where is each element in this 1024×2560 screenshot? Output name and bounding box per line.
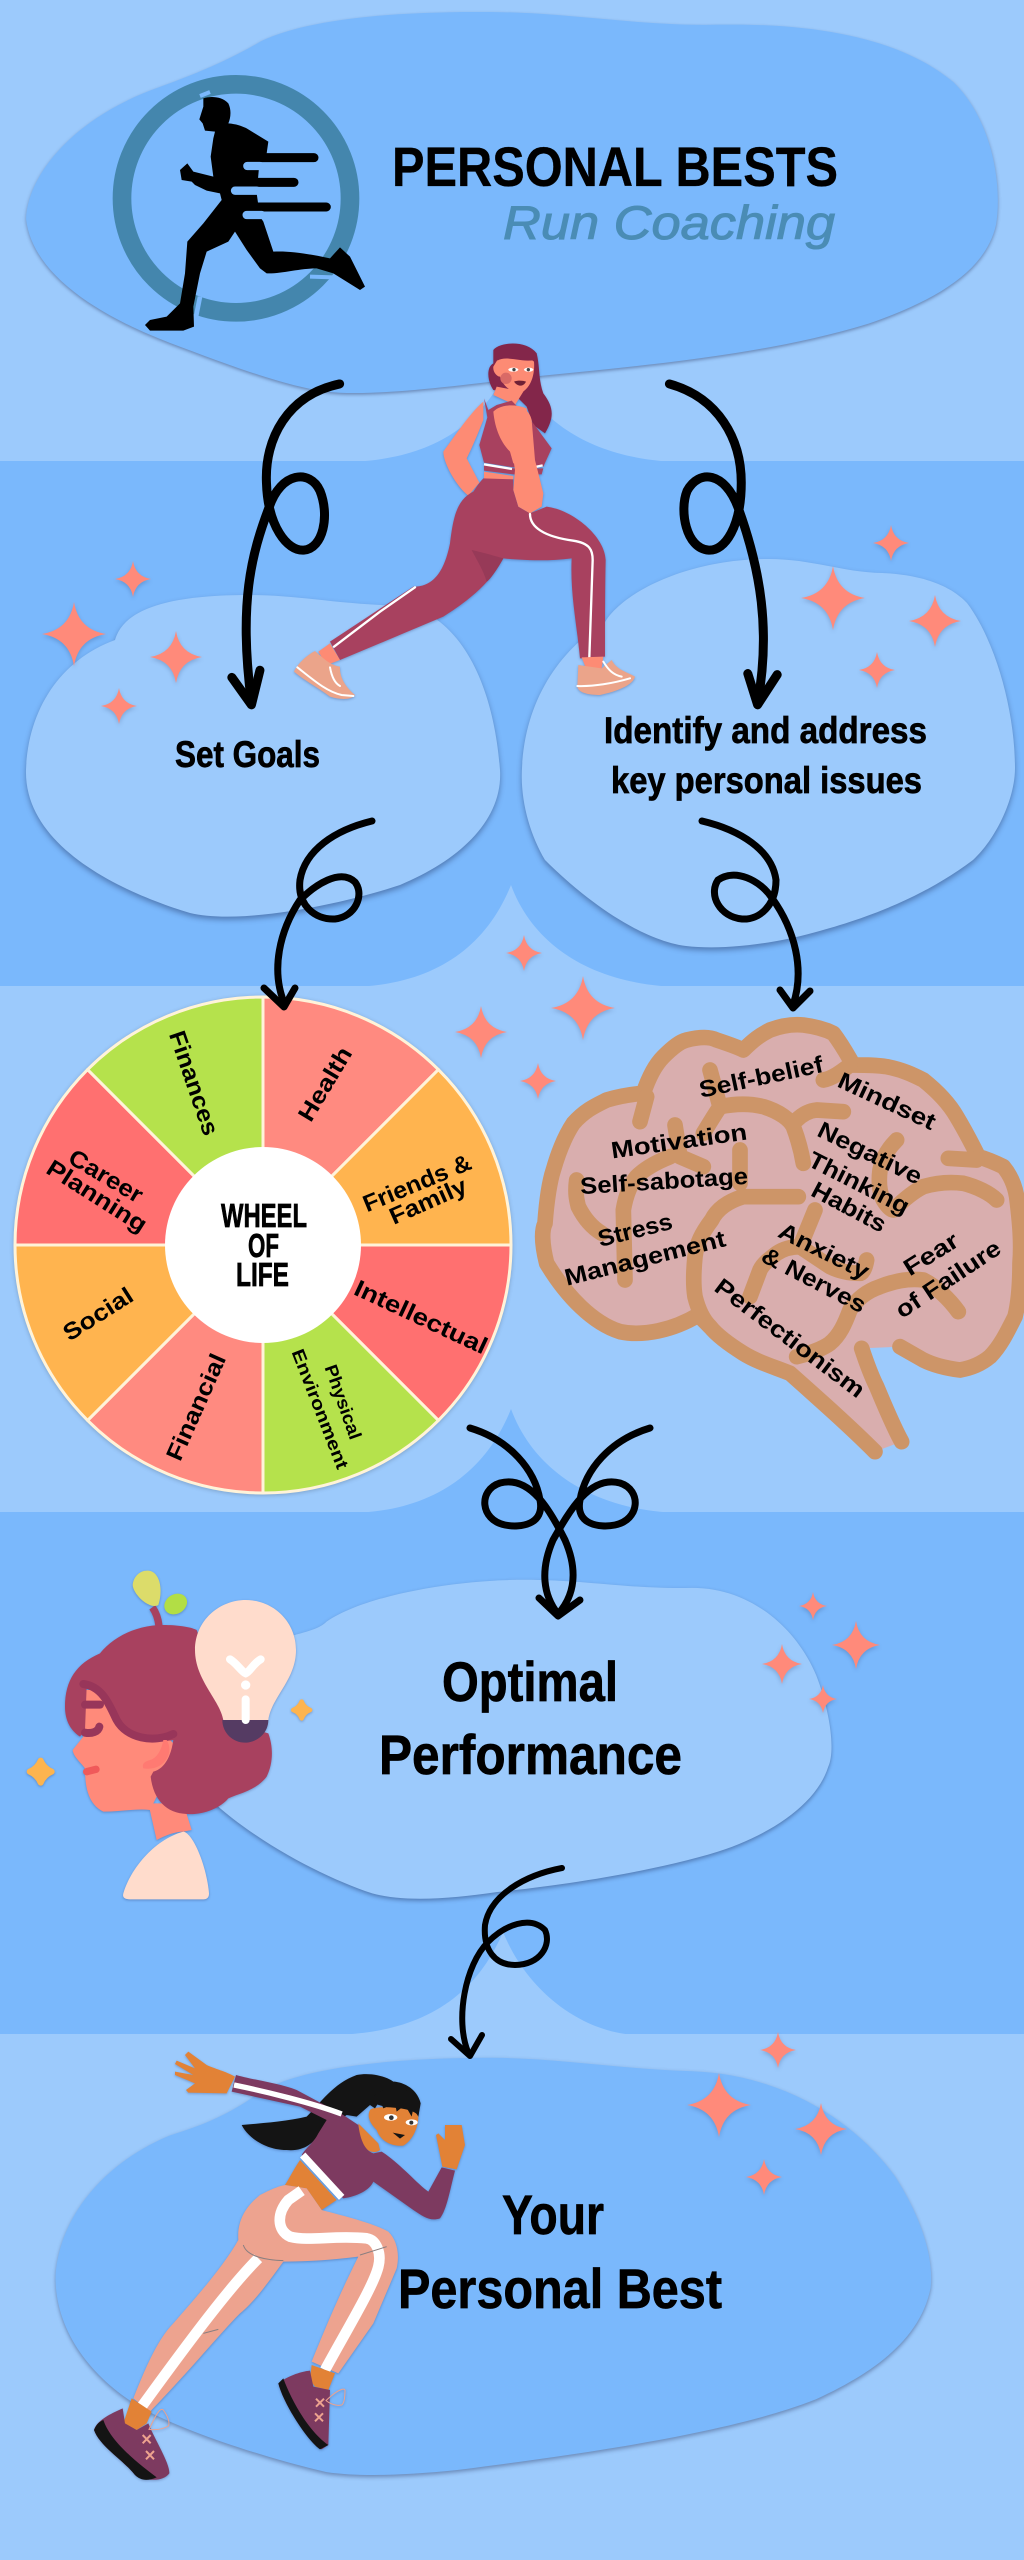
title: Personal Bests: PERSONAL BESTS <box>392 135 838 198</box>
illustration: sprinting woman <box>94 2052 465 2480</box>
wheel hub title: OF <box>248 1227 279 1264</box>
chart: wheel of life <box>15 997 511 1493</box>
sparkles: optimal cluster <box>762 1592 880 1713</box>
heading: optimal performance: Optimal <box>442 1650 618 1713</box>
sparkles: left cluster <box>42 561 202 724</box>
wheel segment labels: Health <box>293 1042 357 1126</box>
panel: personal best blob <box>56 2058 931 2475</box>
logo: runner in ring <box>122 84 365 331</box>
wheel hub title: LIFE <box>236 1256 289 1293</box>
brain labels: Thinking <box>804 1146 914 1220</box>
heading: your personal best: Personal Best <box>398 2257 722 2320</box>
sparkles: right cluster <box>801 525 961 688</box>
heading: optimal performance <box>379 1650 682 1786</box>
wheel hub <box>165 1147 361 1343</box>
arrow: optimal performance to personal best <box>451 1868 562 2056</box>
panel: personal issues blob <box>522 559 1015 947</box>
sparkles: centre cluster <box>455 935 615 1099</box>
heading: identify and address key personal issues <box>604 710 927 801</box>
brain labels: Self-sabotage <box>579 1163 749 1199</box>
sparkles: personal best cluster <box>687 2032 847 2195</box>
brain labels: Mindset <box>834 1067 940 1135</box>
brain labels: Perfectionism <box>710 1273 870 1403</box>
heading: your personal best: Your <box>502 2183 604 2246</box>
subtitle: Run Coaching: Run Coaching <box>503 196 835 249</box>
heading: identify and address key personal issues: key personal issues <box>611 760 922 801</box>
heading: identify and address key personal issues: Identify and address <box>604 710 927 751</box>
heading: set goals: Set Goals <box>175 734 320 775</box>
brain labels: Motivation <box>609 1119 749 1163</box>
brain labels: of Failure <box>890 1235 1006 1323</box>
brain labels: Anxiety <box>774 1218 874 1284</box>
brain labels: Management <box>562 1225 728 1291</box>
panel: set goals blob <box>26 595 500 917</box>
arrow: double loop to optimal performance <box>470 1428 650 1616</box>
arrow: logo to personal issues <box>669 384 777 705</box>
wheel segment labels <box>42 1027 492 1472</box>
brain labels: Stress <box>595 1208 675 1252</box>
panel: header blob <box>26 12 998 393</box>
brain labels: Fear <box>899 1227 963 1281</box>
brain labels: Self-belief <box>697 1051 826 1103</box>
arrow: logo to set goals <box>232 384 340 705</box>
illustration: lunging woman <box>294 344 635 699</box>
brain labels <box>562 1051 1006 1403</box>
wheel segment labels: Planning <box>42 1154 152 1238</box>
brain labels: Habits <box>807 1177 891 1237</box>
wheel segment labels: Physical <box>321 1362 365 1442</box>
wheel segment labels: Friends & <box>359 1149 475 1217</box>
heading: your personal best <box>398 2183 722 2320</box>
wheel segment labels: Finances <box>164 1027 224 1139</box>
arrow: set goals to wheel <box>264 821 372 1007</box>
arrow: personal issues to brain <box>702 821 810 1008</box>
illustration: brain <box>543 1025 1021 1452</box>
brain labels: Negative <box>814 1117 926 1189</box>
wheel segment labels: Family <box>385 1172 471 1230</box>
wheel segment labels: Financial <box>161 1350 231 1464</box>
wheel hub title: WHEEL <box>221 1197 307 1234</box>
wheel segment labels: Social <box>58 1282 138 1346</box>
heading: optimal performance: Performance <box>379 1723 682 1786</box>
wheel hub title <box>221 1197 307 1293</box>
wheel segment labels: Intellectual <box>350 1275 492 1359</box>
wheel segment labels: Environment <box>288 1346 352 1472</box>
wheel segment labels: Career <box>64 1144 148 1208</box>
panel: optimal performance blob <box>216 1580 832 1899</box>
brain labels: & Nerves <box>757 1242 871 1318</box>
illustration: head with light bulb <box>30 1571 310 1899</box>
